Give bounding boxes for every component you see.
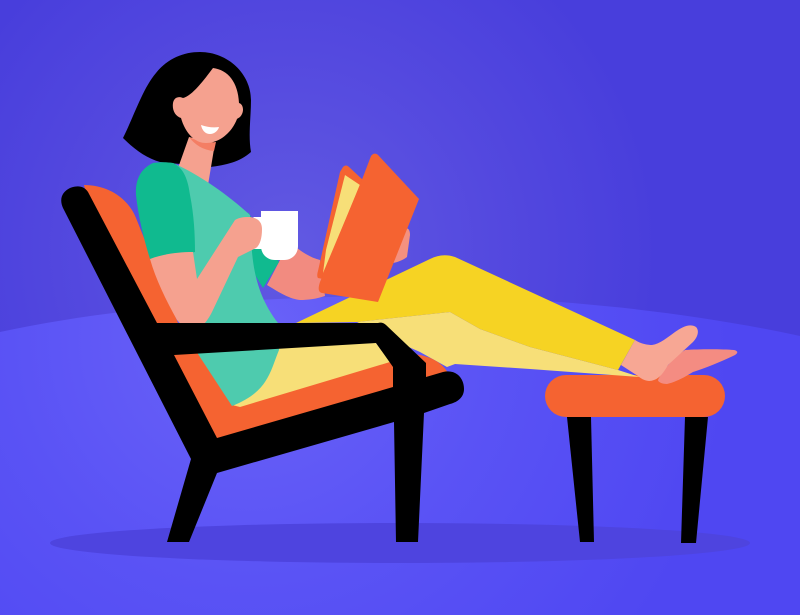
shirt sleeve — [136, 162, 195, 259]
book pages — [323, 175, 360, 273]
woman — [123, 52, 737, 407]
stool leg left — [567, 417, 594, 542]
floor shadow — [50, 523, 750, 563]
book front cover — [319, 154, 419, 302]
far foot — [658, 349, 737, 384]
smile — [201, 125, 219, 134]
near foot — [621, 325, 698, 381]
stool leg right — [681, 417, 708, 543]
book back cover — [317, 166, 364, 279]
chin shadow — [189, 137, 216, 151]
far light trouser — [357, 312, 640, 377]
coffee mug — [253, 211, 298, 260]
hair — [123, 52, 251, 167]
neck — [178, 137, 215, 185]
far arm — [267, 248, 325, 300]
face — [173, 68, 243, 143]
chair frame — [61, 186, 464, 542]
mug body — [261, 211, 298, 260]
stool cushion — [545, 375, 725, 417]
footstool — [545, 375, 725, 543]
far sleeve — [248, 212, 279, 288]
open book — [317, 154, 419, 302]
mug handle — [253, 217, 263, 249]
far hand — [393, 228, 410, 263]
shirt body — [173, 163, 279, 406]
yellow trouser leg — [296, 255, 635, 370]
floor — [0, 296, 800, 615]
light trouser on seat — [232, 343, 390, 407]
chair cushion — [84, 185, 448, 460]
near arm — [150, 217, 262, 330]
